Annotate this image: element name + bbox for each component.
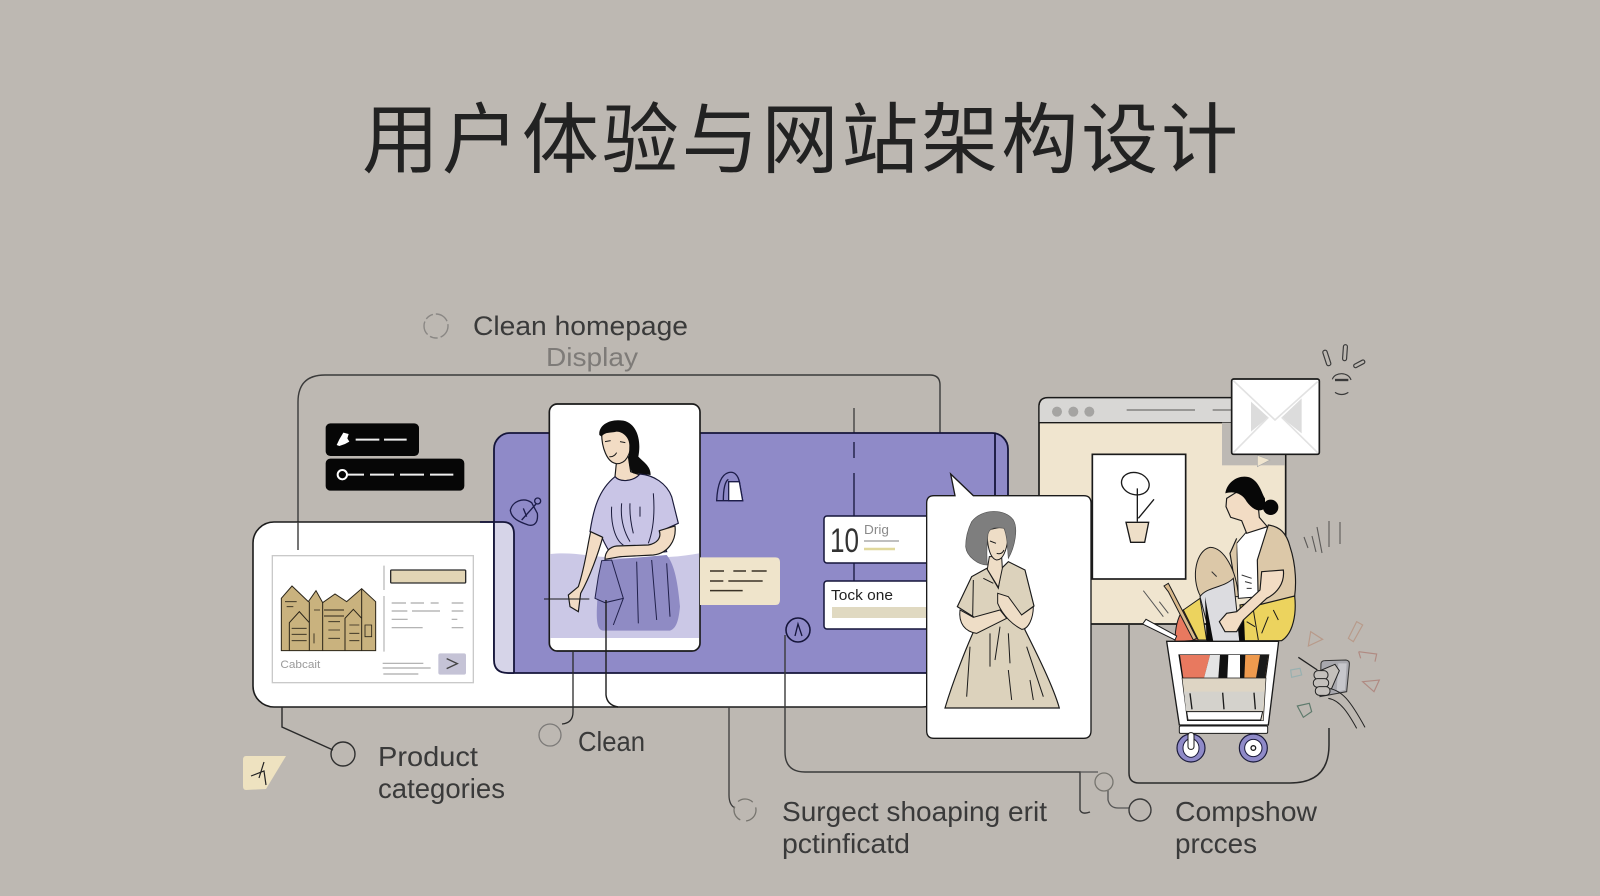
bag — [1195, 547, 1238, 597]
label: compshow prcces: prcces — [1175, 828, 1257, 859]
card: metric 10: 10 — [830, 522, 859, 560]
arrow button — [438, 653, 466, 675]
forearm and hand — [1219, 570, 1284, 632]
hair — [966, 511, 1016, 565]
connector: line to surgect node — [729, 707, 735, 808]
cart — [1167, 641, 1279, 733]
connector: line from photo card to clean label — [562, 651, 573, 724]
label: clean — [539, 724, 645, 757]
icon: envelope — [1232, 379, 1319, 454]
label: product categories — [331, 741, 505, 804]
arms — [960, 610, 1007, 633]
card: tock one: Tock one — [831, 587, 893, 604]
motion lines — [1143, 591, 1168, 617]
label: surgect shoaping erit: pctinficatd — [782, 828, 910, 859]
confetti — [1291, 622, 1379, 717]
card: metric 10 — [824, 516, 944, 563]
cardigan — [1257, 525, 1296, 605]
label: compshow prcces: Compshow — [1175, 796, 1318, 827]
picture frame with plant icon — [1092, 454, 1186, 579]
connector: right frame line — [1129, 624, 1329, 783]
shirt — [1237, 527, 1268, 598]
skirt — [597, 555, 680, 631]
label: clean homepage: Display — [546, 342, 638, 372]
icon: leaf badge — [510, 498, 541, 525]
connector: frame line over base card — [297, 522, 299, 550]
label: compshow prcces — [1095, 773, 1318, 859]
beige button — [391, 570, 466, 583]
icon: sticky note — [243, 756, 286, 790]
connector: vertical line above purple panel — [853, 408, 855, 433]
label: product categories: Product — [378, 741, 478, 772]
card: metric 10: Drig — [864, 522, 889, 537]
title: 用户体验与网站架构设计 — [362, 98, 1238, 184]
badge: circle marker on purple panel — [786, 618, 810, 642]
note: beige text block — [700, 557, 780, 605]
panel: white base card — [253, 522, 943, 707]
panel: browser window — [1039, 398, 1286, 624]
head — [1226, 490, 1267, 533]
label: clean: Clean — [578, 726, 645, 757]
connector: line to compshow node — [1080, 772, 1129, 808]
face and neck — [987, 557, 1002, 587]
arms — [568, 532, 603, 612]
panel: purple display panel — [480, 433, 1008, 673]
label: surgect shoaping erit: Surgect shoaping erit — [782, 796, 1047, 827]
goods in cart — [1175, 610, 1200, 642]
neck and face — [615, 457, 640, 481]
navigation bars — [326, 423, 464, 491]
label: clean homepage — [424, 311, 688, 372]
connector: skirt line to base card — [606, 600, 618, 707]
phone — [1320, 660, 1349, 697]
shirt — [590, 474, 678, 557]
hand — [1313, 664, 1365, 728]
woman with shopping cart — [1143, 477, 1296, 762]
panel: photo card woman in lavender — [544, 404, 700, 651]
panel: product listing — [272, 556, 473, 683]
label: product categories: categories — [378, 773, 505, 804]
dress — [945, 562, 1059, 708]
hand holding phone with confetti — [1291, 622, 1379, 728]
connector: line to product node — [282, 707, 333, 750]
wheels — [1177, 733, 1267, 762]
icon: buildings — [281, 586, 376, 651]
icon: shopping bag — [717, 472, 743, 501]
card: tock one — [824, 581, 944, 629]
panel: product listing: Cabcait — [280, 659, 321, 671]
label: clean homepage: Clean homepage — [473, 311, 688, 341]
decorative motion ticks — [1304, 521, 1340, 553]
connector: line to surgect and compshow labels — [785, 635, 1090, 813]
panel: photo card woman in beige — [927, 474, 1091, 738]
trousers — [1240, 596, 1295, 641]
label: surgect shoaping erit — [734, 796, 1047, 859]
connector: outer frame line — [298, 375, 940, 550]
icon: idea face — [1322, 345, 1365, 394]
